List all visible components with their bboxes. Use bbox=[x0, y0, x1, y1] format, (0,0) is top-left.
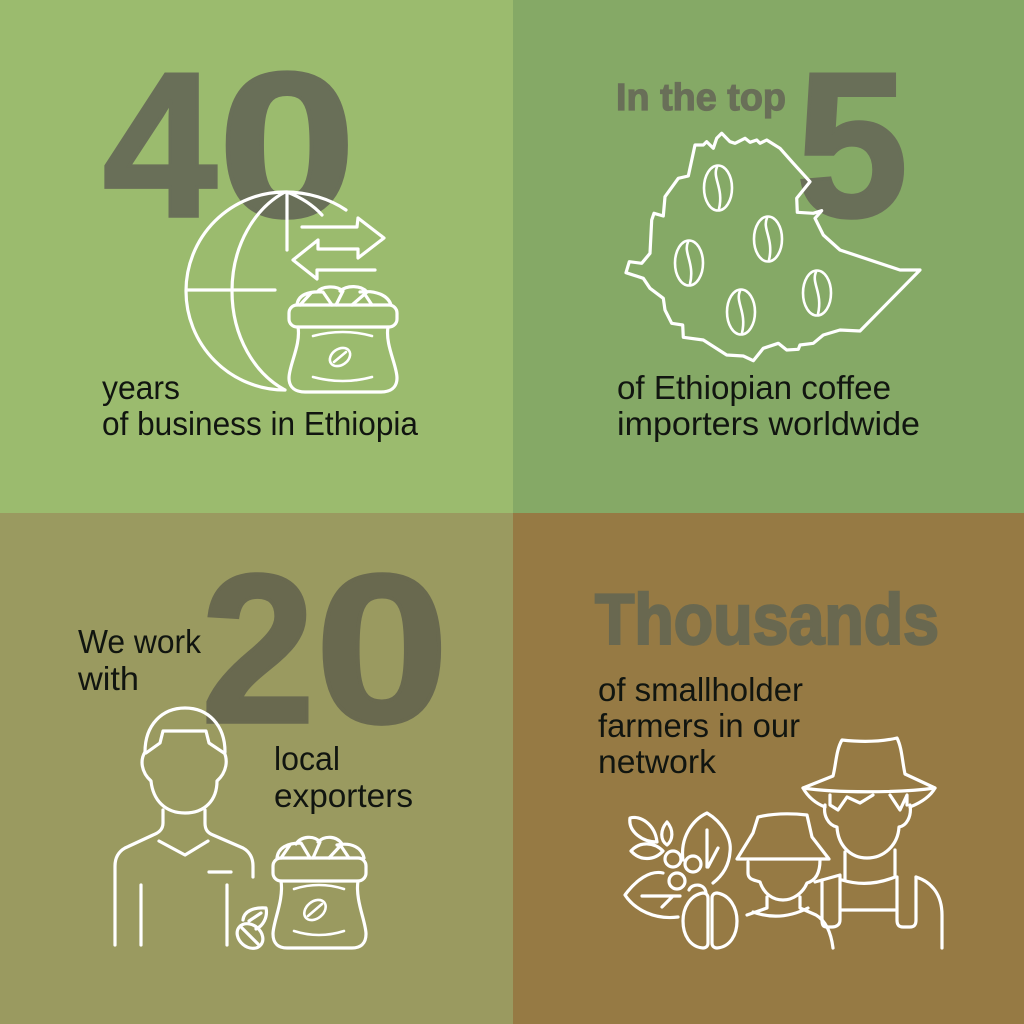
icon: tall farmer with hat and overalls bbox=[803, 738, 942, 948]
panel: 20 local exporters bbox=[0, 513, 513, 1024]
caption: of smallholder farmers in our network: farmers in our bbox=[598, 707, 800, 744]
icon: coffee plant and bean bbox=[625, 813, 737, 948]
caption: local exporters: local bbox=[274, 740, 340, 777]
big number 40: 0 bbox=[218, 30, 356, 260]
big number 20 bbox=[201, 530, 449, 767]
big number 40: 4 bbox=[103, 30, 217, 260]
caption: local exporters bbox=[274, 740, 413, 814]
big number 5: 5 bbox=[796, 30, 908, 260]
caption: of Ethiopian coffee importers worldwide: of Ethiopian coffee bbox=[617, 369, 891, 406]
coffee beans bbox=[675, 166, 831, 334]
caption: We work with: with bbox=[77, 660, 139, 697]
map outline bbox=[626, 133, 920, 361]
big number 20: 0 bbox=[315, 530, 449, 767]
caption: of Ethiopian coffee importers worldwide bbox=[617, 369, 920, 442]
globe bbox=[186, 192, 346, 390]
exchange arrows bbox=[293, 218, 384, 279]
caption: We work with: We work bbox=[78, 623, 201, 660]
caption: We work with bbox=[77, 623, 201, 697]
caption: of smallholder farmers in our network: network bbox=[598, 743, 716, 780]
icon: map of Ethiopia with coffee beans bbox=[626, 133, 920, 361]
caption: years of business in Ethiopia bbox=[102, 369, 419, 442]
heading: In the top: In the top bbox=[616, 77, 786, 119]
panel: top 5 importers bbox=[513, 0, 1024, 513]
panel: thousands of smallholder farmers bbox=[513, 513, 1024, 1024]
caption: years of business in Ethiopia: years bbox=[102, 369, 180, 406]
heading: Thousands: Thousands bbox=[595, 581, 939, 660]
big number 20: 2 bbox=[201, 530, 315, 767]
icon: coffee sack bbox=[273, 837, 366, 948]
icon: exporter person bbox=[115, 708, 253, 945]
caption: local exporters: exporters bbox=[274, 777, 413, 814]
panel: 40 years of business bbox=[0, 0, 513, 513]
caption: of smallholder farmers in our network bbox=[598, 671, 803, 780]
icon: globe with arrows and coffee sack bbox=[186, 192, 397, 392]
icon: two coffee beans bbox=[232, 908, 268, 953]
big number 40 bbox=[103, 30, 356, 260]
caption: of smallholder farmers in our network: of smallholder bbox=[598, 671, 803, 708]
coffee sack bbox=[289, 287, 397, 392]
caption: years of business in Ethiopia: of business in Ethiopia bbox=[102, 405, 419, 442]
caption: of Ethiopian coffee importers worldwide: importers worldwide bbox=[617, 405, 920, 442]
icon: small farmer with hat bbox=[737, 814, 833, 948]
